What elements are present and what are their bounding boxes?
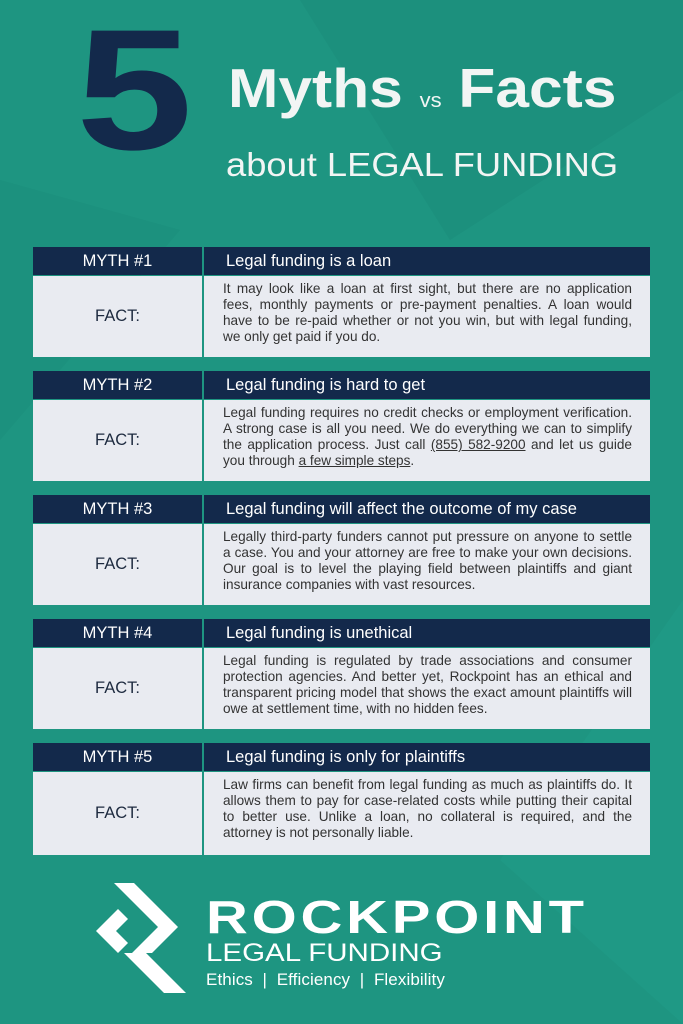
panel: myth 2: Legal funding requires no credit checks or employment verification. A strong case is all you need. We do everything we can to simplify the application process. Just call (855) 582-9200 and let us guide you through a few simple steps. — [223, 405, 632, 468]
panel: myth 1: It may look like a loan at first sight, but there are no application fees, monthly payments or pre-payment penalties. A loan would have to be re-paid whether or not you win, but with legal funding, we only get paid if you do. — [223, 281, 632, 344]
panel: myth 4: Legal funding is regulated by trade associations and consumer protection agencies. And better yet, Rockpoint has an ethical and transparent pricing model that shows the exact amount plaintiffs will owe at settlement time, with no hidden fees. — [223, 653, 632, 716]
panel: myth 2: FACT: — [95, 431, 140, 449]
panel: myth 4: MYTH #4 — [83, 624, 152, 642]
panel: myth 5: Law firms can benefit from legal funding as much as plaintiffs do. It allows them to pay for case-related costs while putting their capital to better use. Unlike a loan, no collateral is required, and the attorney is not personally liable. — [223, 777, 632, 840]
icon: rockpoint logo mark — [96, 883, 186, 993]
panel: myth 2 — [33, 371, 650, 481]
panel: myth 3: FACT: — [95, 555, 140, 573]
logo text — [206, 891, 588, 989]
panel: myth 5: MYTH #5 — [83, 748, 152, 766]
logo text: LEGAL FUNDING — [206, 939, 443, 967]
logo text: ROCKPOINT — [206, 891, 588, 943]
panel: myth 5 — [33, 743, 650, 855]
subtitle: about LEGAL FUNDING — [226, 146, 618, 183]
panel: myth 1: MYTH #1 — [83, 252, 152, 270]
panel: myth 1 — [33, 247, 650, 357]
panel: myth 5: Legal funding is only for plaintiffs — [226, 748, 465, 766]
panel: myth 4: FACT: — [95, 679, 140, 697]
panel: myth 2: MYTH #2 — [83, 376, 152, 394]
title: Myths vs Facts: Myths vs Facts — [228, 57, 616, 119]
panel: myth 3 — [33, 495, 650, 605]
panel: myth 3: MYTH #3 — [83, 500, 152, 518]
panel: myth 1: Legal funding is a loan — [226, 252, 391, 270]
panel: myth 4 — [33, 619, 650, 729]
panel: myth 4: Legal funding is unethical — [226, 624, 412, 642]
logo text: Ethics | Efficiency | Flexibility — [206, 970, 445, 989]
panel: myth 2: Legal funding is hard to get — [226, 376, 425, 394]
panel: myth 3: Legal funding will affect the outcome of my case — [226, 500, 577, 518]
panel: myth 3: Legally third-party funders cannot put pressure on anyone to settle a case. You and your attorney are free to make your own decisions. Our goal is to level the playing field between plaintiffs and giant insurance companies with vast resources. — [223, 529, 632, 592]
panel: myth 5: FACT: — [95, 804, 140, 822]
panel: myth 1: FACT: — [95, 307, 140, 325]
